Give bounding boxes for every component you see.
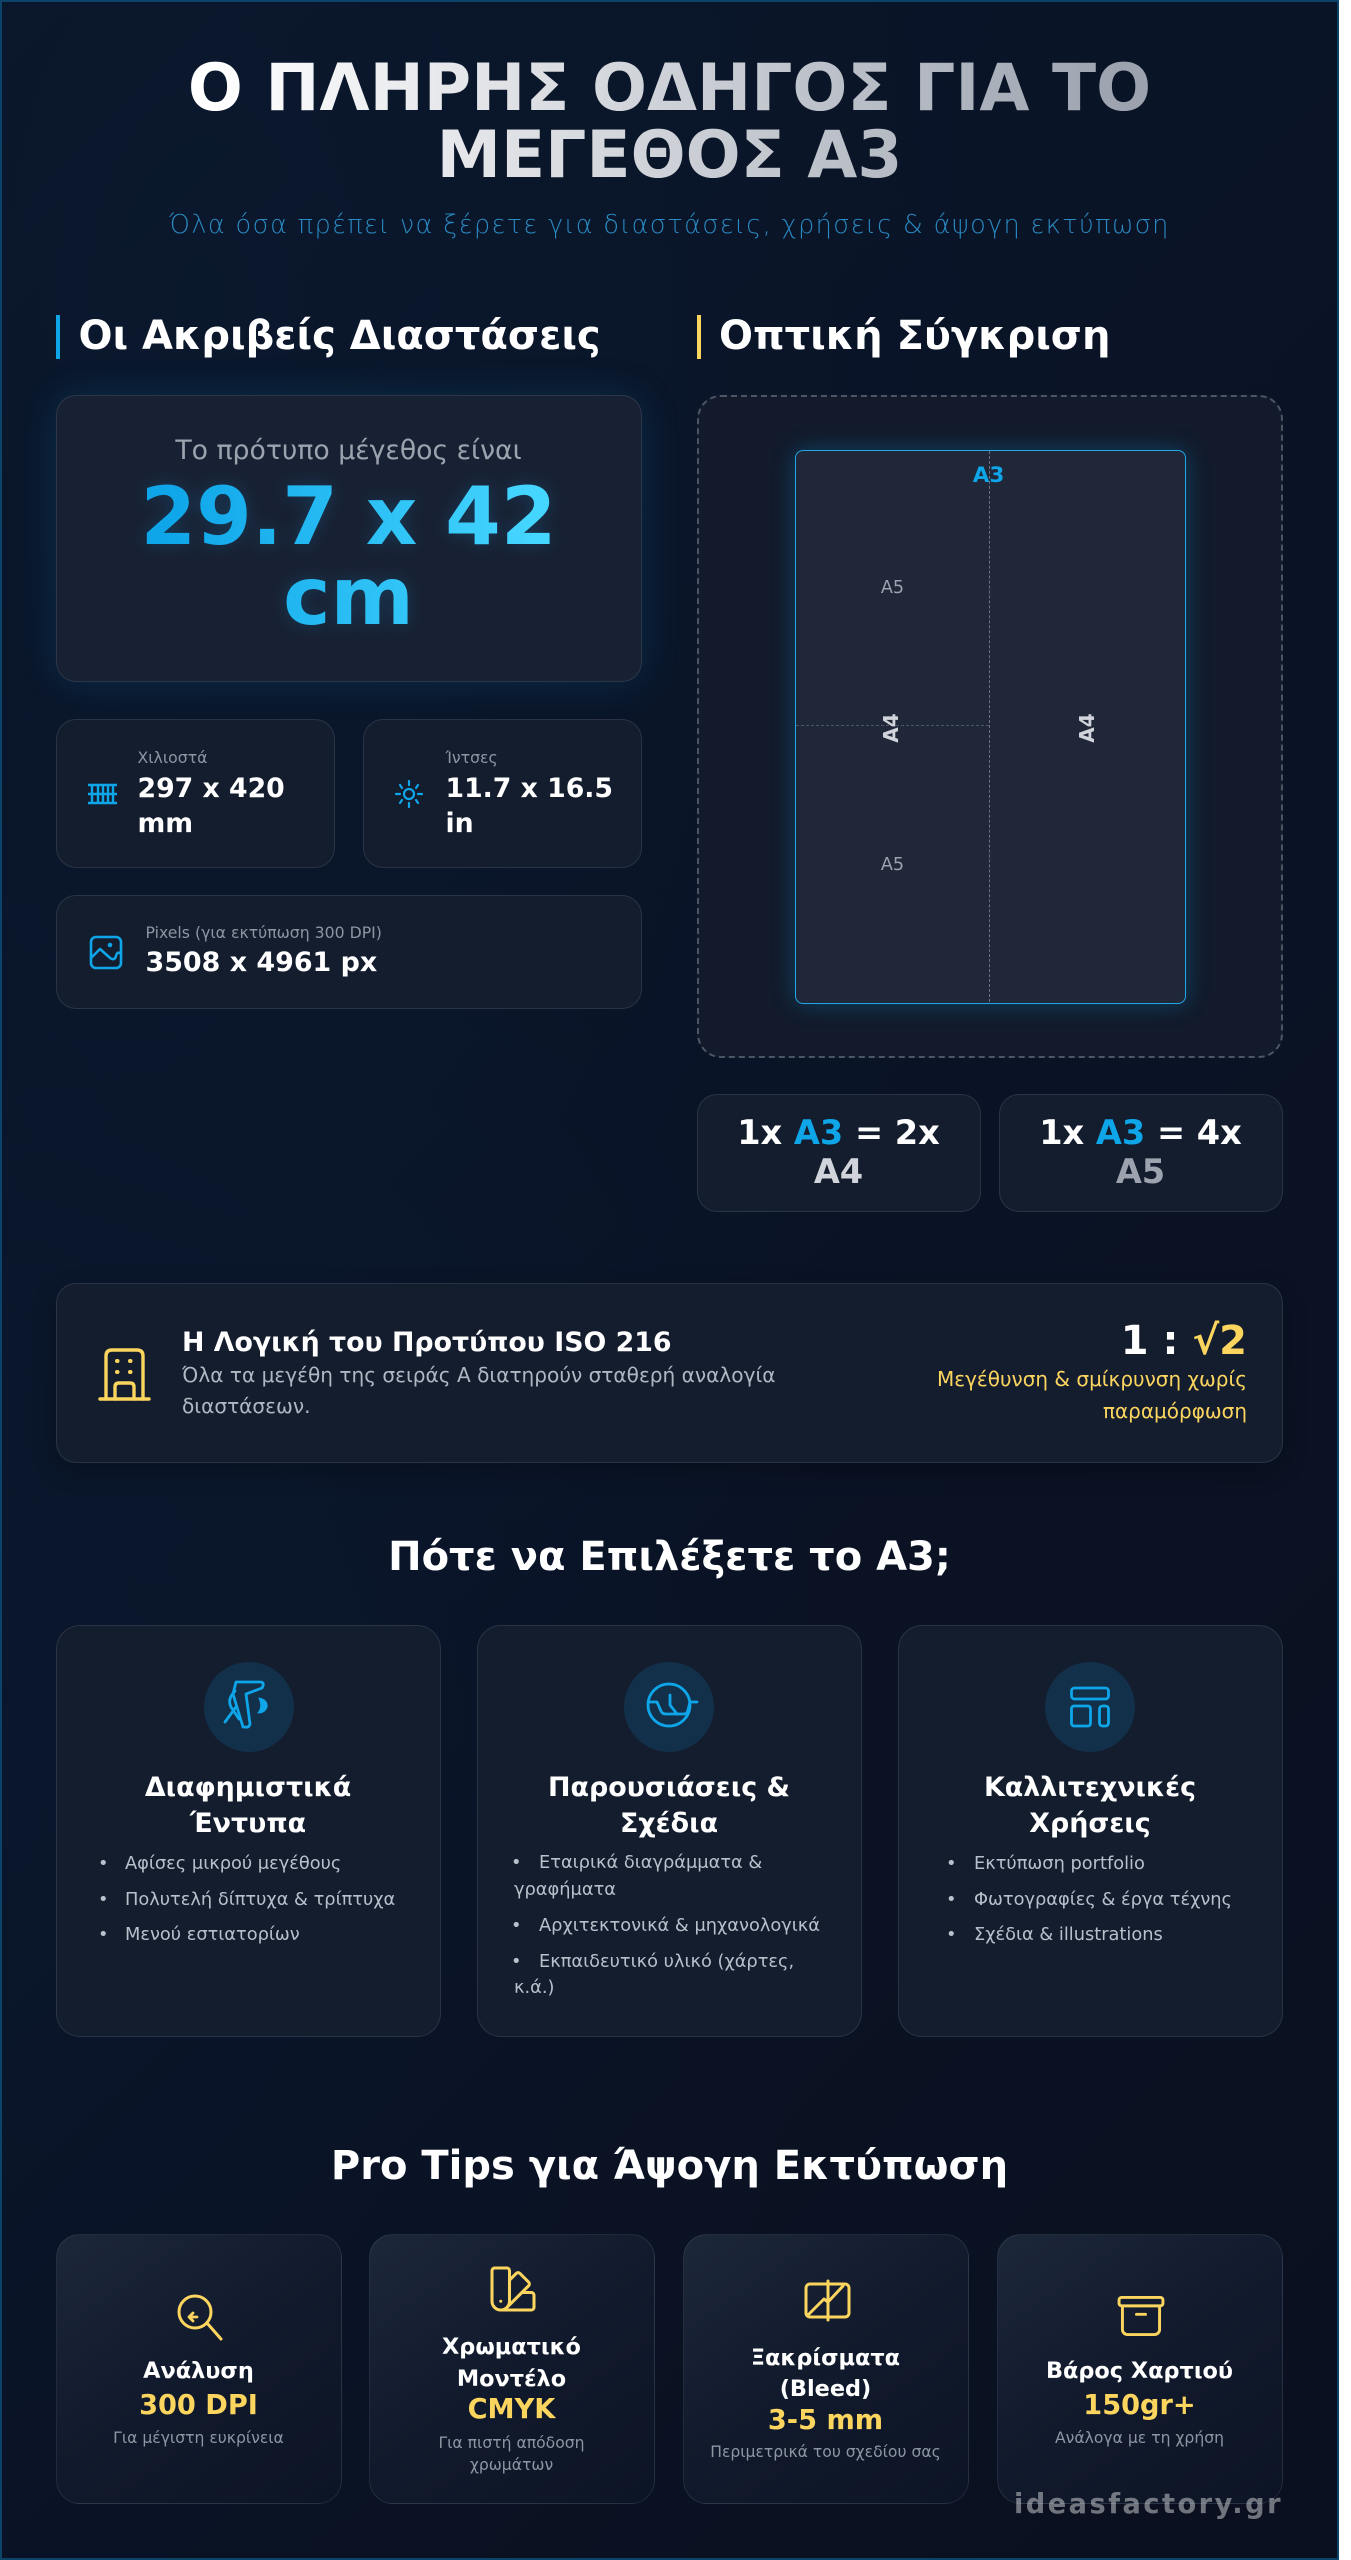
comparison: A3 to A5: 1x A3 = 4x (1039, 1112, 1242, 1152)
standard size value: cm (283, 550, 414, 643)
list: • (98, 1889, 108, 1910)
panel: advertising prints (56, 1625, 441, 2037)
standard size value: 29.7 x 42 (140, 470, 556, 563)
tip title (751, 2344, 900, 2402)
tip description: χρωμάτων (470, 2456, 553, 2474)
title: Χρήσεις (1029, 1808, 1151, 1839)
watermark: ideasfactory.gr (1014, 2489, 1283, 2520)
standard size value (57, 477, 640, 637)
label: Χιλιοστά (138, 748, 207, 767)
heading: pro tips: Pro Tips για Άψογη Εκτύπωση (331, 2143, 1008, 2189)
subtitle: Όλα όσα πρέπει να ξέρετε για διαστάσεις, χρήσεις & άψογη εκτύπωση (169, 210, 1170, 240)
title (188, 51, 1151, 193)
ratio caption: Μεγέθυνση & σμίκρυνση χωρίς (937, 1367, 1247, 1391)
list: Εκτύπωση portfolio (974, 1853, 1145, 1874)
ISO description: διαστάσεων. (182, 1394, 310, 1418)
panel: bleed tip (683, 2234, 969, 2504)
panel: ISO 216 (56, 1283, 1283, 1463)
list: Αφίσες μικρού μεγέθους (125, 1853, 341, 1874)
comparison: A3 to A4: 1x A3 = 2x (737, 1112, 940, 1152)
panel: inches (363, 719, 642, 868)
list: Αρχιτεκτονικά & μηχανολογικά (539, 1915, 820, 1936)
list: • (511, 1915, 522, 1936)
list: • (946, 1853, 956, 1874)
list (98, 1853, 395, 1945)
list: • (511, 1951, 522, 1972)
A3 sheet diagram (795, 450, 1186, 1004)
tip description: Για πιστή απόδοση (438, 2434, 585, 2452)
label A4 right: A4 (1074, 713, 1098, 742)
title: Παρουσιάσεις & (548, 1772, 790, 1803)
list (511, 1852, 820, 1998)
icon: archive box (1118, 2296, 1164, 2336)
comparison: A3 to A5 (999, 1094, 1283, 1212)
label A4 left: A4 (878, 713, 902, 742)
heading: when to choose A3: Πότε να Επιλέξετε το Α3; (388, 1534, 951, 1580)
label: Pixels (για εκτύπωση 300 DPI) (146, 923, 382, 942)
title: Έντυπα (190, 1808, 306, 1839)
icon: chart dial (624, 1662, 714, 1752)
title: Σχέδια (620, 1808, 718, 1839)
icon: image (90, 936, 122, 970)
comparison: A3 to A5: A5 (1116, 1152, 1165, 1191)
label A5 bottom: A5 (881, 854, 904, 874)
list: • (946, 1889, 956, 1910)
tip value: CMYK (468, 2394, 555, 2425)
list: γραφήματα (514, 1879, 616, 1900)
panel: standard size (56, 395, 642, 682)
icon: paint brush (204, 1662, 294, 1752)
value: 297 x 420 mm (138, 773, 285, 839)
value: 3508 x 4961 px (146, 947, 377, 978)
tip description: Ανάλογα με τη χρήση (1055, 2429, 1224, 2447)
list: Εταιρικά διαγράμματα & (539, 1852, 762, 1873)
title: ΜΕΓΕΘΟΣ Α3 (437, 118, 902, 193)
tip title: Ανάλυση (143, 2358, 254, 2384)
comparison: A3 to A4: A4 (814, 1152, 863, 1191)
title (984, 1772, 1196, 1839)
heading: visual comparison: Οπτική Σύγκριση (719, 313, 1110, 359)
tip title: Μοντέλο (457, 2366, 566, 2392)
list: Εκπαιδευτικό υλικό (χάρτες, (539, 1951, 794, 1972)
list: κ.ά.) (514, 1977, 554, 1998)
label A5 top: A5 (881, 578, 904, 598)
tip title: Βάρος Χαρτιού (1046, 2358, 1233, 2384)
ratio value: 1 : √2 (1121, 1318, 1247, 1364)
tip title: Ξακρίσματα (751, 2344, 900, 2370)
list: • (98, 1853, 108, 1874)
tip description: Περιμετρικά του σχεδίου σας (710, 2443, 941, 2461)
list: • (98, 1924, 108, 1945)
panel: pixels (56, 895, 642, 1009)
tip title: (Bleed) (780, 2376, 871, 2402)
list: Πολυτελή δίπτυχα & τρίπτυχα (125, 1889, 395, 1910)
panel: paper weight tip (997, 2234, 1283, 2504)
heading: exact dimensions: Οι Ακριβείς Διαστάσεις (78, 313, 601, 359)
value: 11.7 x 16.5 in (446, 773, 613, 839)
ISO description (182, 1363, 776, 1418)
panel: resolution tip (56, 2234, 342, 2504)
icon: layout (1045, 1662, 1135, 1752)
tip title: Χρωματικό (442, 2334, 581, 2360)
title: Καλλιτεχνικές (984, 1772, 1196, 1803)
title (548, 1772, 790, 1839)
label: Ίντσες (446, 748, 498, 767)
standard size label: Το πρότυπο μέγεθος είναι (175, 434, 522, 466)
list: • (946, 1924, 956, 1945)
list: Σχέδια & illustrations (974, 1924, 1163, 1945)
list: • (511, 1852, 522, 1873)
icon: sun (394, 780, 424, 808)
title: Διαφημιστικά (145, 1772, 351, 1803)
ISO title: Η Λογική του Προτύπου ISO 216 (182, 1327, 672, 1358)
panel: millimetres (56, 719, 335, 868)
icon: swatch (490, 2266, 536, 2312)
panel: presentations (477, 1625, 862, 2037)
ratio caption: παραμόρφωση (1103, 1398, 1247, 1422)
title (145, 1772, 351, 1839)
title: Ο ΠΛΗΡΗΣ ΟΔΗΓΟΣ ΓΙΑ ΤΟ (188, 51, 1151, 126)
panel: artistic uses (898, 1625, 1283, 2037)
tip description (438, 2434, 585, 2474)
tip title (442, 2334, 581, 2392)
tip value: 300 DPI (139, 2390, 258, 2421)
list (946, 1853, 1232, 1945)
icon: ruler grid (88, 784, 117, 804)
tip description: Για μέγιστη ευκρίνεια (113, 2429, 284, 2447)
tip value: 3-5 mm (768, 2405, 883, 2436)
label A3: A3 (973, 462, 1004, 488)
tip value: 150gr+ (1083, 2390, 1196, 2421)
ratio caption (937, 1367, 1247, 1422)
comparison: A3 to A4 (697, 1094, 981, 1212)
icon: building (98, 1348, 151, 1401)
icon: magnifier (178, 2294, 223, 2341)
icon: bleed square (804, 2280, 850, 2322)
list: Μενού εστιατορίων (125, 1924, 300, 1945)
panel: colour model tip (369, 2234, 655, 2504)
panel: visual comparison (697, 395, 1283, 1058)
list: Φωτογραφίες & έργα τέχνης (974, 1889, 1232, 1910)
ISO description: Όλα τα μεγέθη της σειράς Α διατηρούν σταθερή αναλογία (182, 1363, 776, 1387)
